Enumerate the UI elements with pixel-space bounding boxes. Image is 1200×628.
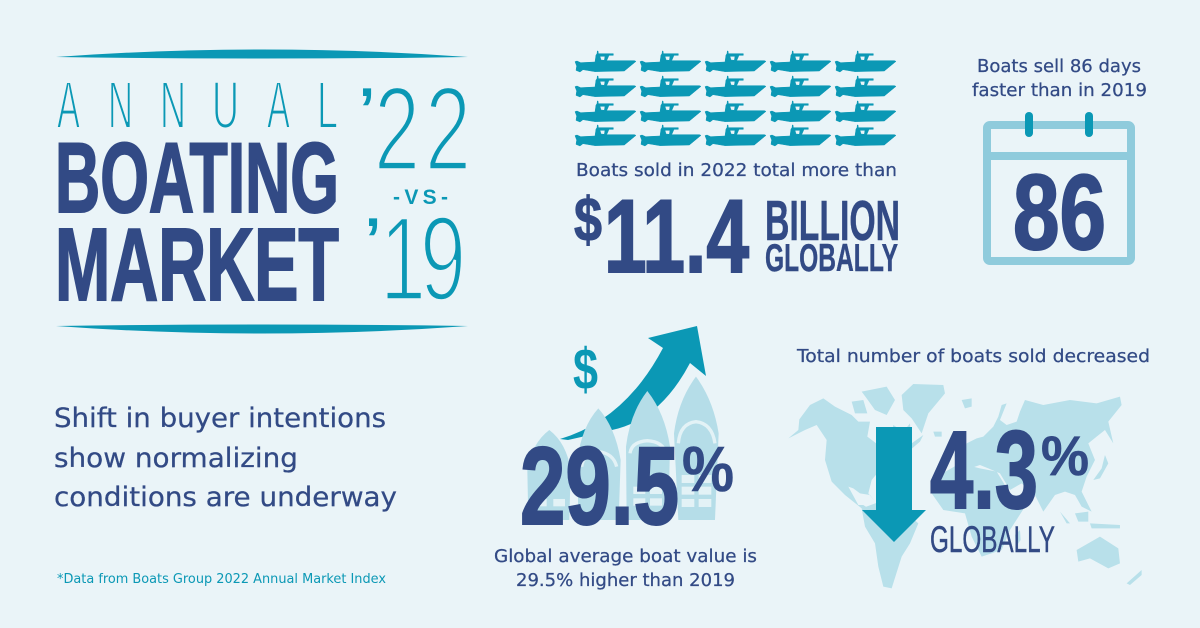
- word: annual: N: [160, 68, 186, 143]
- boats sold caption: Boats sold in 2022 total more than: [576, 160, 897, 181]
- word: annual: N: [108, 68, 133, 143]
- year 19: ’: [365, 206, 381, 273]
- title block: [55, 50, 471, 334]
- word: annual: L: [317, 68, 338, 143]
- decrease caption: Total number of boats sold decreased: [796, 346, 1150, 367]
- calendar caption: [972, 56, 1147, 101]
- year 19: 1: [380, 192, 426, 326]
- word: annual: A: [57, 68, 80, 143]
- subtitle text: Shift in buyer intentions: [54, 403, 386, 434]
- indonesia: [1060, 512, 1120, 528]
- icon: rising boats: [527, 377, 719, 520]
- year 19: 9: [420, 192, 466, 326]
- billion label: BILLION: [765, 189, 900, 253]
- value caption: Global average boat value is: [494, 546, 757, 567]
- word: annual: A: [267, 68, 290, 143]
- value: 4.3: [930, 409, 1038, 532]
- year 22: 2: [374, 62, 420, 196]
- word: market: MARKET: [55, 207, 339, 322]
- value: 29.5: [520, 425, 679, 548]
- north america: [788, 398, 923, 508]
- dollar icon: $: [573, 337, 598, 402]
- calendar number: 86: [1013, 152, 1106, 272]
- word: annual: [57, 68, 338, 143]
- growth arrow: [560, 326, 706, 440]
- svalbard: [962, 398, 972, 408]
- new zealand: [1127, 570, 1142, 585]
- boat 4: [674, 377, 719, 520]
- calendar caption: Boats sell 86 days: [977, 56, 1141, 77]
- versus label: -VS-: [393, 186, 448, 209]
- percent sign: %: [1041, 424, 1089, 487]
- subtitle text: conditions are underway: [54, 482, 397, 513]
- arctic islands: [852, 387, 895, 415]
- globally label: GLOBALLY: [930, 519, 1055, 560]
- globally label: GLOBALLY: [765, 237, 898, 280]
- value caption: 29.5% higher than 2019: [516, 570, 735, 591]
- japan: [1093, 455, 1108, 480]
- boat deck details: [582, 422, 715, 467]
- subtitle text: [54, 403, 397, 513]
- boat seats: [535, 475, 711, 507]
- year 22: 2: [425, 62, 471, 196]
- value: 11.4: [604, 179, 749, 295]
- calendar caption: faster than in 2019: [972, 80, 1147, 101]
- boat 3: [626, 391, 670, 520]
- madagascar: [1015, 530, 1021, 547]
- top swoosh: [56, 50, 468, 58]
- percent sign: %: [682, 433, 734, 505]
- bottom swoosh: [56, 324, 468, 334]
- world map: [788, 384, 1142, 588]
- iceland: [933, 432, 942, 437]
- boat 1: [527, 430, 571, 520]
- africa: [932, 463, 1025, 557]
- boat 2: [577, 408, 621, 520]
- south america: [862, 502, 918, 588]
- eurasia: [965, 397, 1122, 512]
- stat: 11.4 billion: [574, 179, 900, 295]
- icon: calendar with 86: [987, 112, 1131, 272]
- greenland: [902, 384, 945, 433]
- stat: 4.3 percent: [930, 409, 1089, 560]
- value caption: [494, 546, 757, 591]
- down arrow: [862, 427, 926, 542]
- source footnote: *Data from Boats Group 2022 Annual Market Index: [57, 571, 386, 587]
- year 19: [365, 192, 466, 326]
- word: annual: U: [212, 68, 239, 143]
- australia: [1077, 537, 1120, 568]
- icon: grid of boats: [575, 51, 896, 146]
- year 22: [359, 62, 471, 196]
- subtitle text: show normalizing: [54, 443, 298, 474]
- year 22: ’: [359, 76, 375, 143]
- dollar sign: $: [574, 186, 602, 255]
- stat: 29.5 percent: [520, 425, 734, 548]
- word: boating: BOATING: [55, 122, 339, 233]
